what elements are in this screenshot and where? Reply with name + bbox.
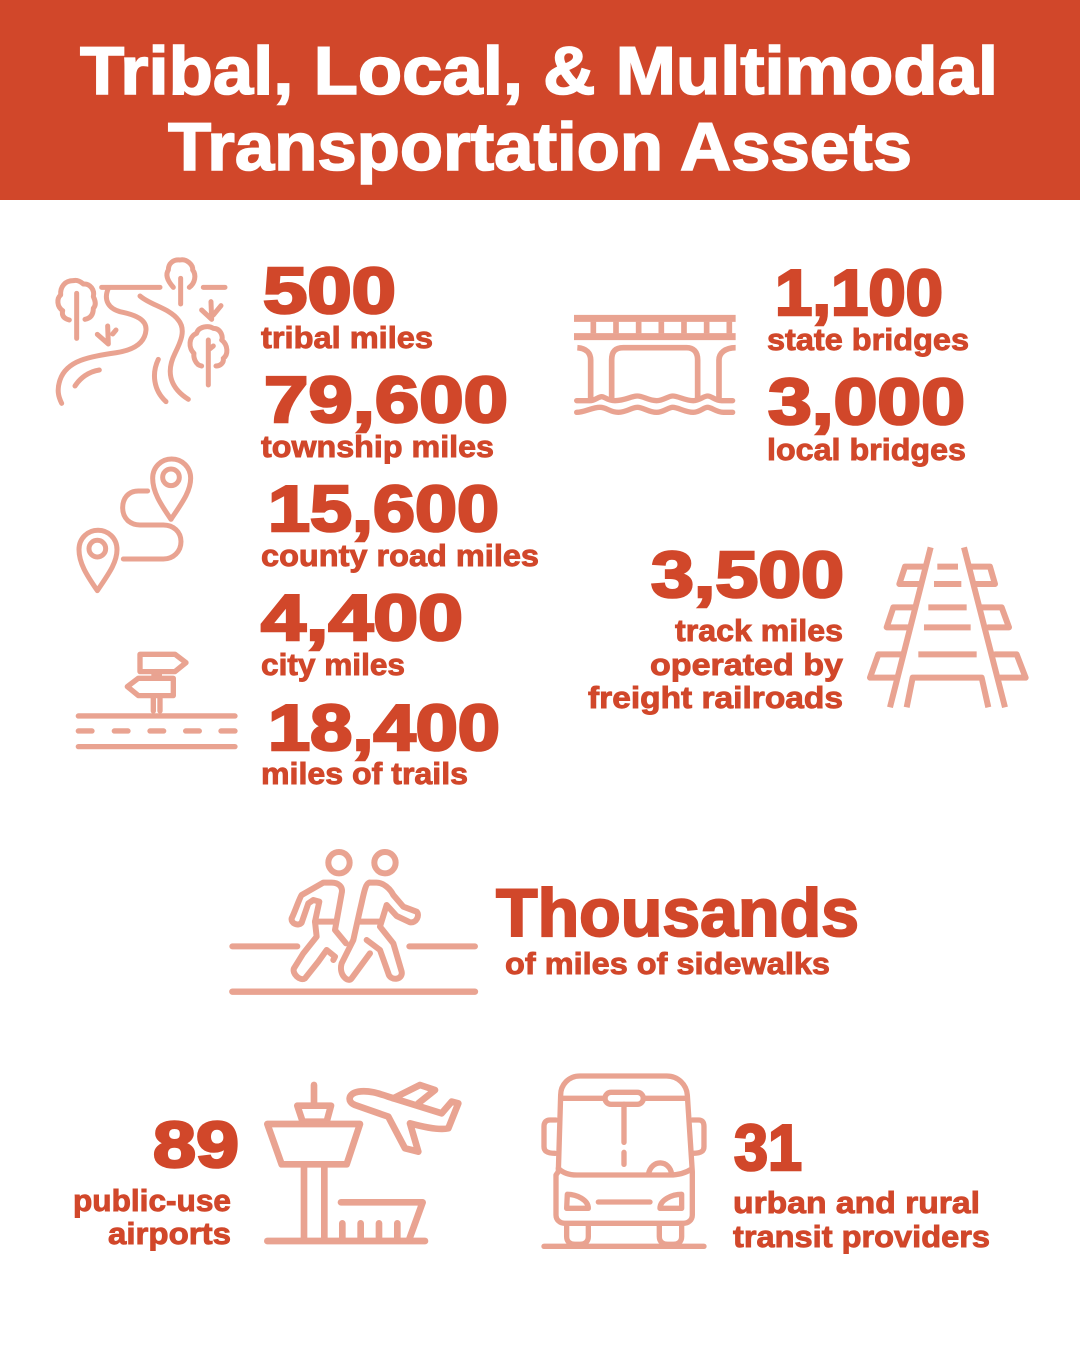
icon: railroad track (870, 547, 1026, 707)
panel: freight rail stats (588, 538, 844, 715)
icon: bridge over water (574, 318, 736, 412)
header banner (0, 0, 1080, 200)
panel: sidewalk stat: Thousands (496, 875, 859, 951)
panel: bridge stats: 1,100 (775, 256, 943, 329)
panel: sidewalk stat: of miles of sidewalks (505, 946, 830, 981)
panel: road mileage stats: county road miles (261, 538, 539, 573)
panel: road mileage stats: tribal miles (261, 320, 433, 355)
panel: airport stat: airports (108, 1216, 231, 1251)
panel: airport stat: 89 (153, 1108, 239, 1181)
panel: transit stat: urban and rural (733, 1185, 980, 1220)
panel: freight rail stats: track miles (675, 613, 843, 648)
panel: bridge stats: 3,000 (768, 365, 965, 438)
panel: freight rail stats: operated by (650, 647, 844, 682)
panel: bridge stats (767, 256, 969, 467)
panel: road mileage stats: 500 (263, 254, 396, 327)
icon: road with signpost (78, 654, 235, 747)
panel: freight rail stats: 3,500 (651, 538, 844, 611)
panel: transit stat: 31 (734, 1111, 802, 1184)
panel: road mileage stats: township miles (261, 429, 494, 464)
panel: airport stat: public-use (73, 1183, 231, 1218)
panel: road mileage stats: city miles (261, 647, 405, 682)
panel: road mileage stats: miles of trails (261, 756, 468, 791)
panel: freight rail stats: freight railroads (588, 680, 843, 715)
panel: transit stat (733, 1111, 990, 1254)
panel: road mileage stats (261, 254, 539, 791)
icon: route with map pins (79, 459, 191, 591)
icon: airport tower and plane (267, 1085, 458, 1241)
panel: road mileage stats: 18,400 (268, 691, 500, 764)
icon: bus front (544, 1076, 704, 1246)
title: Tribal, Local, & Multimodal (80, 33, 998, 109)
panel: road mileage stats: 4,400 (261, 581, 463, 654)
icon: rural roads and trees (58, 260, 227, 403)
panel: bridge stats: local bridges (767, 432, 966, 467)
panel: road mileage stats: 79,600 (264, 363, 508, 436)
panel: bridge stats: state bridges (767, 322, 969, 357)
panel: road mileage stats: 15,600 (268, 472, 499, 545)
title (80, 33, 998, 185)
panel: airport stat (73, 1108, 239, 1251)
panel: transit stat: transit providers (733, 1219, 990, 1254)
title: Transportation Assets (168, 109, 912, 185)
icon: two people walking on sidewalk (232, 852, 475, 992)
